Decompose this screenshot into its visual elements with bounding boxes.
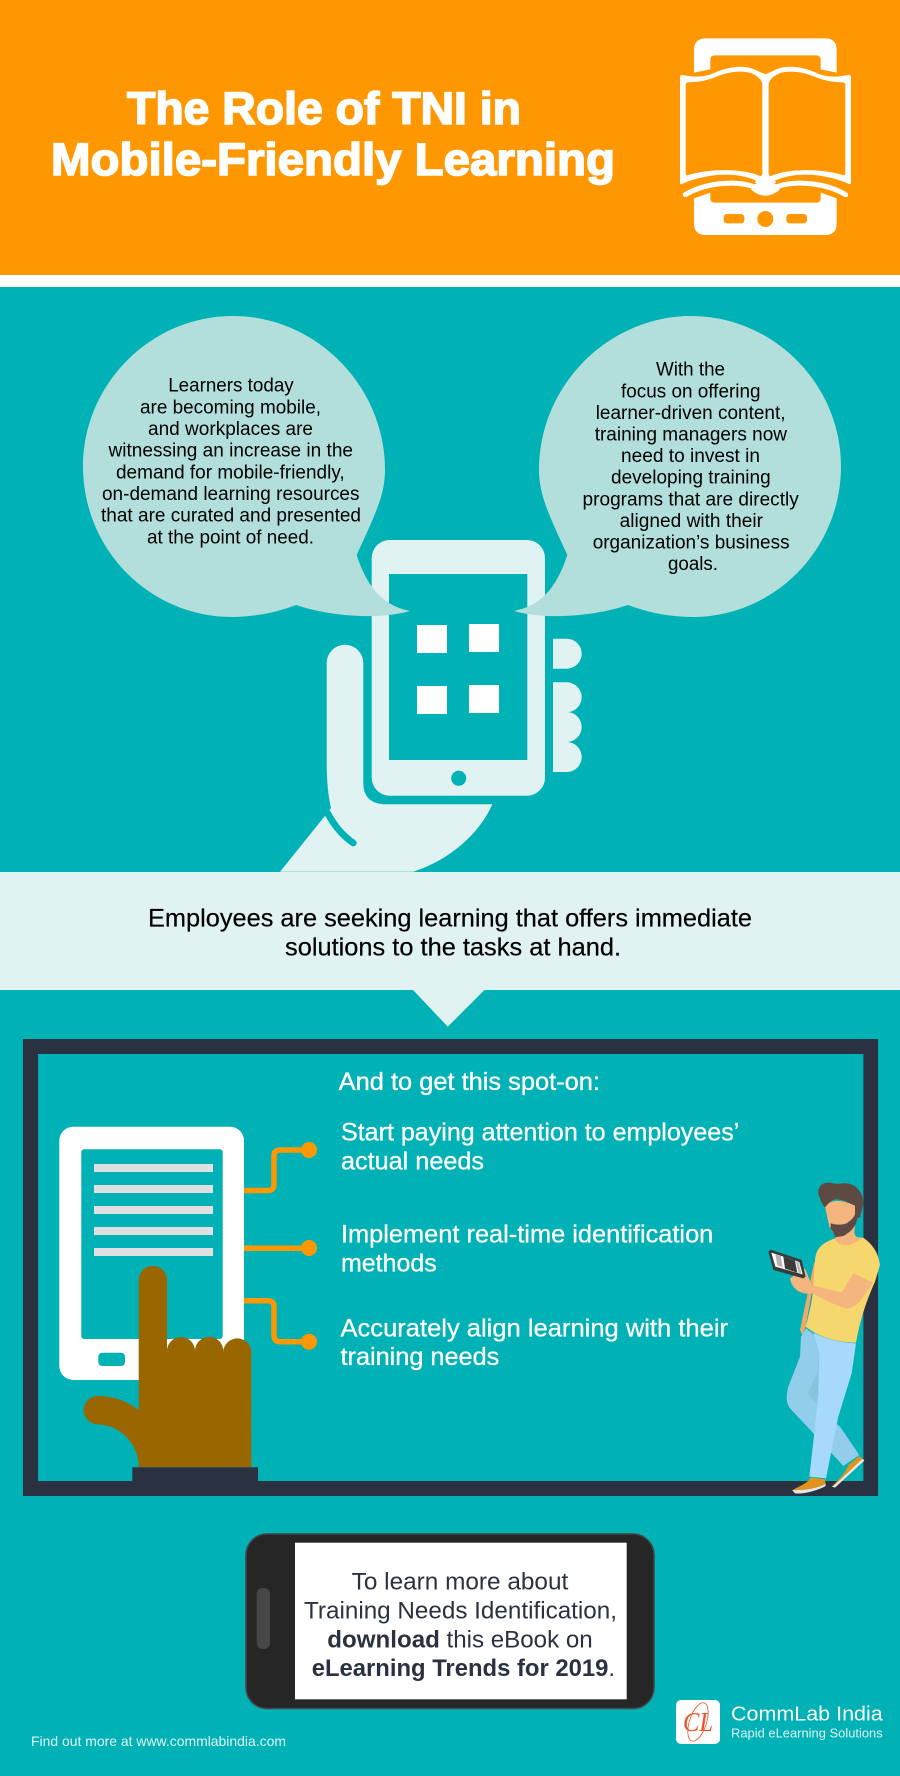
logo: CommLab India: CL xyxy=(683,1707,713,1737)
panel: dark framed steps panel xyxy=(23,1039,880,1496)
text: three action points: Accurately align learning with their xyxy=(340,1315,728,1343)
text: three action points: training needs xyxy=(340,1343,499,1371)
text: right bubble copy: learner-driven content, xyxy=(596,403,786,424)
panel: orange header xyxy=(0,0,900,287)
text: right bubble copy: training managers now xyxy=(595,424,787,445)
text: band statement: Employees are seeking learning that offers immediate xyxy=(148,905,752,933)
text: left bubble copy: witnessing an increase in the xyxy=(107,441,353,462)
text: three action points: Implement real-time identification xyxy=(341,1221,713,1249)
title: Mobile-Friendly Learning xyxy=(51,134,615,185)
panel: light band callout xyxy=(0,872,900,1027)
title xyxy=(51,83,615,185)
heading: and to get this spot-on: And to get this spot-on: xyxy=(339,1068,600,1096)
footer link text: Find out more at www.commlabindia.com xyxy=(31,1733,286,1749)
text: right bubble copy: focus on offering xyxy=(621,381,760,402)
text: ebook call to action: download this eBook on xyxy=(327,1626,593,1653)
text: three action points xyxy=(340,1119,739,1371)
logo: CommLab India: CommLab India xyxy=(731,1704,884,1726)
text: right bubble copy: aligned with their xyxy=(620,511,764,532)
text: right bubble copy: organization’s business xyxy=(593,533,790,554)
connector: second orange line xyxy=(244,1240,317,1256)
connector: first orange line xyxy=(244,1142,317,1190)
text: ebook call to action: To learn more about xyxy=(352,1568,569,1595)
text: right bubble copy: With the xyxy=(656,360,725,381)
text: band statement: solutions to the tasks at hand. xyxy=(285,934,621,962)
text: left bubble copy xyxy=(101,376,361,548)
text: right bubble copy: programs that are directly xyxy=(582,489,799,510)
icon: pointing brown hand xyxy=(84,1266,258,1481)
text: left bubble copy: and workplaces are xyxy=(148,419,313,440)
illustration: man leaning with tablet xyxy=(768,1183,880,1494)
text: right bubble copy: developing training xyxy=(611,468,771,489)
logo: CommLab India: Rapid eLearning Solutions xyxy=(731,1725,883,1740)
panel: horizontal phone with ebook message xyxy=(246,1534,654,1708)
text: left bubble copy: are becoming mobile, xyxy=(140,397,321,418)
connector: third orange line xyxy=(244,1301,317,1350)
panel: right speech bubble xyxy=(514,316,841,617)
text: three action points: methods xyxy=(341,1249,437,1277)
text: left bubble copy: on-demand learning resources xyxy=(102,484,360,505)
text: ebook call to action: eLearning Trends for 2019. xyxy=(312,1655,615,1682)
text: band statement xyxy=(148,905,752,962)
text: right bubble copy xyxy=(582,360,799,575)
text: three action points: actual needs xyxy=(341,1147,484,1175)
text: left bubble copy: that are curated and presented xyxy=(101,506,361,527)
text: left bubble copy: at the point of need. xyxy=(147,527,314,548)
text: right bubble copy: goals. xyxy=(668,554,718,575)
icon: hand holding phone xyxy=(280,540,582,872)
title: The Role of TNI in xyxy=(127,83,521,134)
text: three action points: Start paying attention to employees’ xyxy=(341,1119,739,1147)
icon: tablet with text lines xyxy=(59,1127,244,1380)
icon: book on mobile phone xyxy=(680,38,851,235)
text: left bubble copy: Learners today xyxy=(168,376,294,397)
text: right bubble copy: need to invest in xyxy=(621,446,760,467)
text: ebook call to action: Training Needs Identification, xyxy=(304,1597,617,1624)
text: ebook call to action xyxy=(304,1568,617,1682)
panel: left speech bubble xyxy=(83,316,582,872)
text: left bubble copy: demand for mobile-friendly, xyxy=(116,462,345,483)
logo: CommLab India xyxy=(676,1700,884,1744)
